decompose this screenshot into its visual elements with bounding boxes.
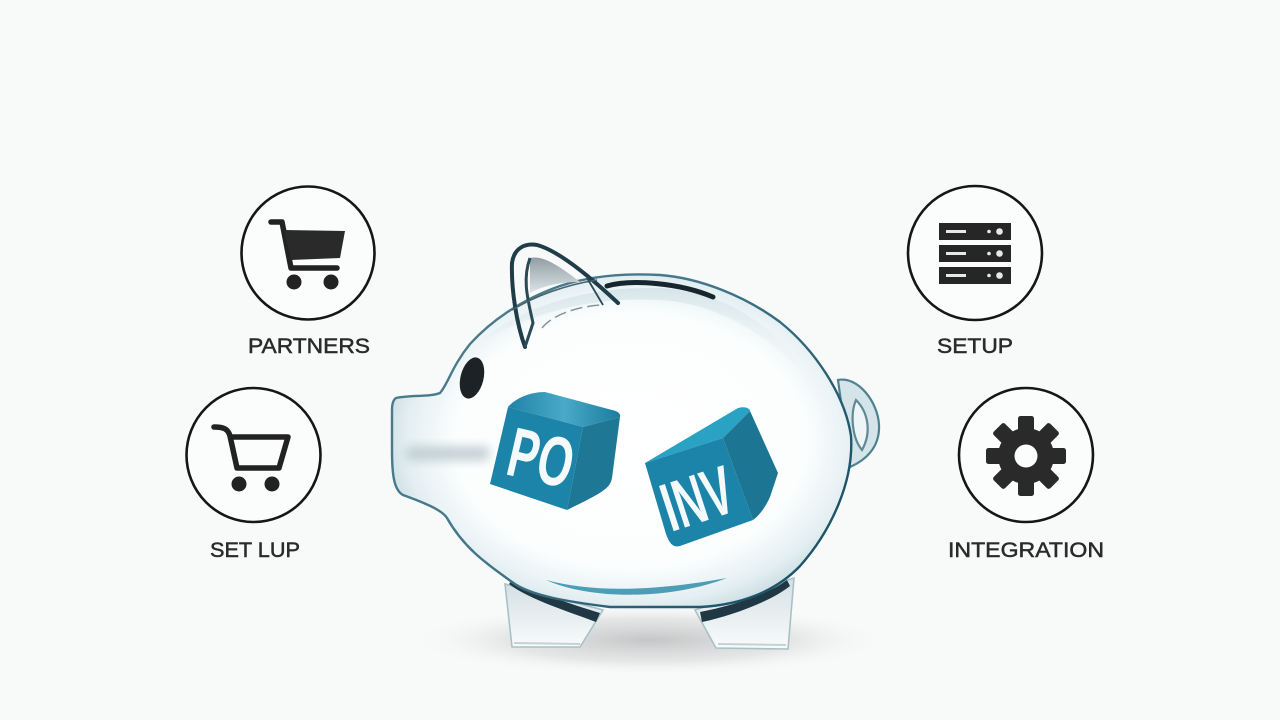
pig body xyxy=(392,274,851,607)
INV cube: INV xyxy=(652,452,743,547)
icon: gear xyxy=(986,416,1066,496)
set up circle xyxy=(186,388,320,522)
integration label: INTEGRATION xyxy=(948,538,1104,562)
set up label: SET LUP xyxy=(210,538,300,562)
item: integration xyxy=(948,388,1104,562)
PO cube xyxy=(490,392,620,510)
piggy bank illustration xyxy=(392,245,879,649)
pig ear xyxy=(512,245,618,347)
setup label: SETUP xyxy=(937,334,1013,358)
icon: server rack xyxy=(939,223,1011,284)
INV cube xyxy=(645,407,778,547)
snout reflection xyxy=(405,446,490,461)
pig tail xyxy=(838,380,879,467)
pig legs xyxy=(505,578,794,649)
icon: outline shopping cart xyxy=(214,427,288,492)
ear base dash xyxy=(542,305,602,328)
ground shadow xyxy=(410,604,890,676)
PO cube: PO xyxy=(501,414,581,504)
partners label: PARTNERS xyxy=(248,334,370,358)
setup circle xyxy=(908,186,1042,320)
glass highlight top xyxy=(480,288,825,400)
item: partners xyxy=(242,186,374,358)
belly highlight xyxy=(546,578,727,595)
icon: filled shopping cart xyxy=(271,222,345,290)
partners circle xyxy=(242,186,374,320)
item: setup xyxy=(908,186,1042,358)
pig eye xyxy=(456,355,488,401)
integration circle xyxy=(959,388,1093,522)
coin slot xyxy=(607,283,713,297)
item: set up xyxy=(186,388,320,562)
